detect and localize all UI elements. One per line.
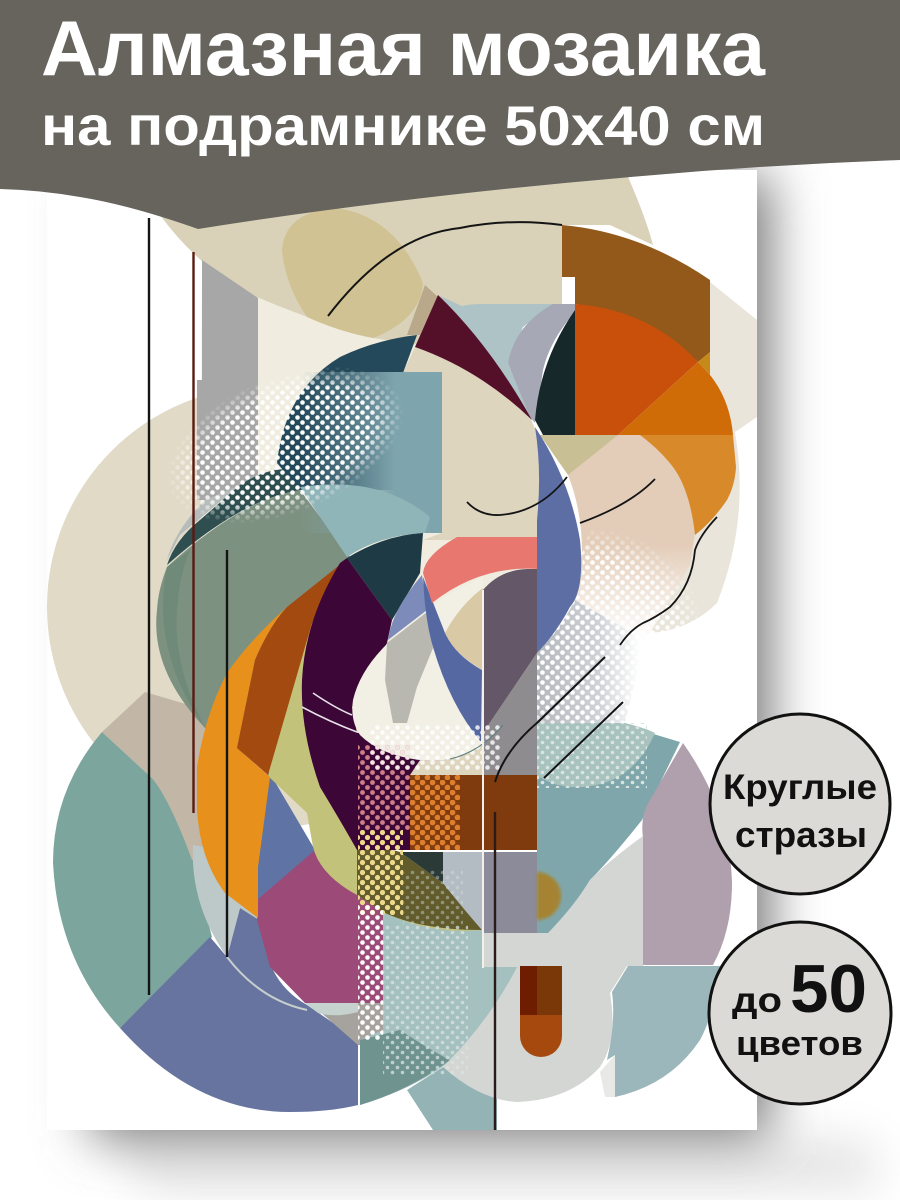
orange dots: [410, 775, 460, 850]
cream field: [200, 290, 535, 645]
teal panel: [537, 733, 680, 935]
left halftone: [150, 360, 430, 540]
brown half dot: [537, 872, 561, 920]
dark olive: [357, 840, 482, 930]
teal circle: [53, 732, 212, 1028]
left beige circle: [47, 398, 359, 826]
orange leaf: [197, 607, 287, 918]
header banner: [0, 0, 900, 229]
sage circle: [156, 490, 350, 760]
subtitle: на подрамнике 50х40 см: [41, 94, 765, 157]
yellow dots: [358, 830, 403, 915]
lilac segment: [642, 743, 732, 965]
pink dots: [358, 745, 410, 830]
pale thin arc: [227, 957, 307, 1010]
pale grey arc: [167, 485, 240, 560]
cream leaf: [352, 577, 483, 761]
pale arch: [443, 836, 643, 1102]
olive leaf: [268, 590, 482, 931]
right halftone: [537, 530, 697, 730]
top beige form: [160, 170, 653, 345]
dark teal band: [167, 469, 300, 565]
white dots on magenta: [358, 905, 383, 1040]
grey halftone ground: [537, 600, 645, 723]
badge: up to 50 colours: цветов: [736, 1025, 863, 1063]
badge: up to 50 colours: [709, 922, 891, 1104]
badge: round rhinestones: стразы: [735, 814, 867, 855]
salmon arc: [423, 537, 538, 603]
capsule dark right: [537, 966, 562, 1015]
pale strip: [600, 1055, 615, 1097]
blue bowl: [360, 905, 520, 1105]
canvas shadow: [90, 175, 880, 1190]
olive dots: [403, 870, 463, 925]
grey wedge: [322, 1003, 383, 1045]
lilac arc: [508, 304, 575, 423]
amber quarter: [618, 362, 733, 435]
tan ellipse: [282, 208, 423, 338]
blue strand left: [388, 575, 427, 640]
capsule dark left: [520, 966, 537, 1015]
bottom right teal: [607, 966, 720, 1097]
center beige: [403, 347, 540, 540]
pale dots on bowl: [383, 925, 468, 1075]
pale circle: [537, 723, 655, 787]
teal fan: [300, 484, 430, 557]
badge: round rhinestones: [710, 714, 890, 894]
badge: up to 50 colours: 50: [790, 951, 867, 1027]
blue ribbon: [535, 427, 581, 653]
beige lens: [445, 588, 483, 670]
brown square: [562, 225, 710, 362]
tan sliver: [407, 285, 438, 335]
abstract artwork: [47, 170, 757, 1130]
pale right band: [650, 282, 757, 633]
thin black lines: [149, 218, 717, 1130]
rust leaf: [237, 563, 342, 775]
thin teal arc: [450, 725, 503, 759]
amber lower: [640, 435, 736, 535]
pale arc: [192, 845, 257, 956]
grey inner leaf: [385, 612, 433, 723]
dark triangle: [400, 852, 443, 883]
pale bar: [305, 1003, 358, 1015]
deep purple: [302, 558, 460, 850]
blue strand right: [423, 577, 482, 742]
badge: round rhinestones: Круглые: [723, 768, 877, 807]
grey lower strip: [483, 653, 537, 775]
rust capsule: [520, 966, 562, 1057]
sage crescent: [163, 550, 205, 728]
leaf base halftone: [370, 725, 500, 770]
white vertical: [482, 590, 484, 968]
orange quarter: [575, 304, 698, 435]
grey block left: [443, 852, 482, 930]
grey block right: [484, 852, 537, 933]
title: Алмазная мозаика: [41, 4, 766, 92]
grey strip: [197, 260, 258, 500]
khaki triangle: [540, 435, 618, 475]
maroon leaf: [415, 295, 532, 420]
blue square: [300, 372, 442, 533]
purple grey strip: [483, 569, 537, 733]
dark wedge: [347, 533, 423, 620]
gold fleck: [698, 352, 710, 375]
circle dots: [537, 723, 647, 788]
dark arc: [277, 335, 417, 490]
taupe wedge: [102, 692, 206, 860]
periwinkle: [257, 770, 315, 900]
dark green quarter: [535, 310, 575, 435]
blue quadrant: [120, 908, 358, 1112]
badge: up to 50 colours: до: [732, 981, 782, 1020]
lower teal circle: [407, 1067, 497, 1130]
rust block: [410, 775, 537, 850]
peach circle: [568, 435, 695, 632]
dark bowl bottom: [360, 1030, 450, 1105]
canvas front: [47, 170, 757, 1130]
beige strip below leaf: [410, 745, 483, 775]
thin pale strokes: [302, 693, 357, 732]
pale blue top: [440, 296, 553, 420]
magenta: [257, 850, 383, 1003]
